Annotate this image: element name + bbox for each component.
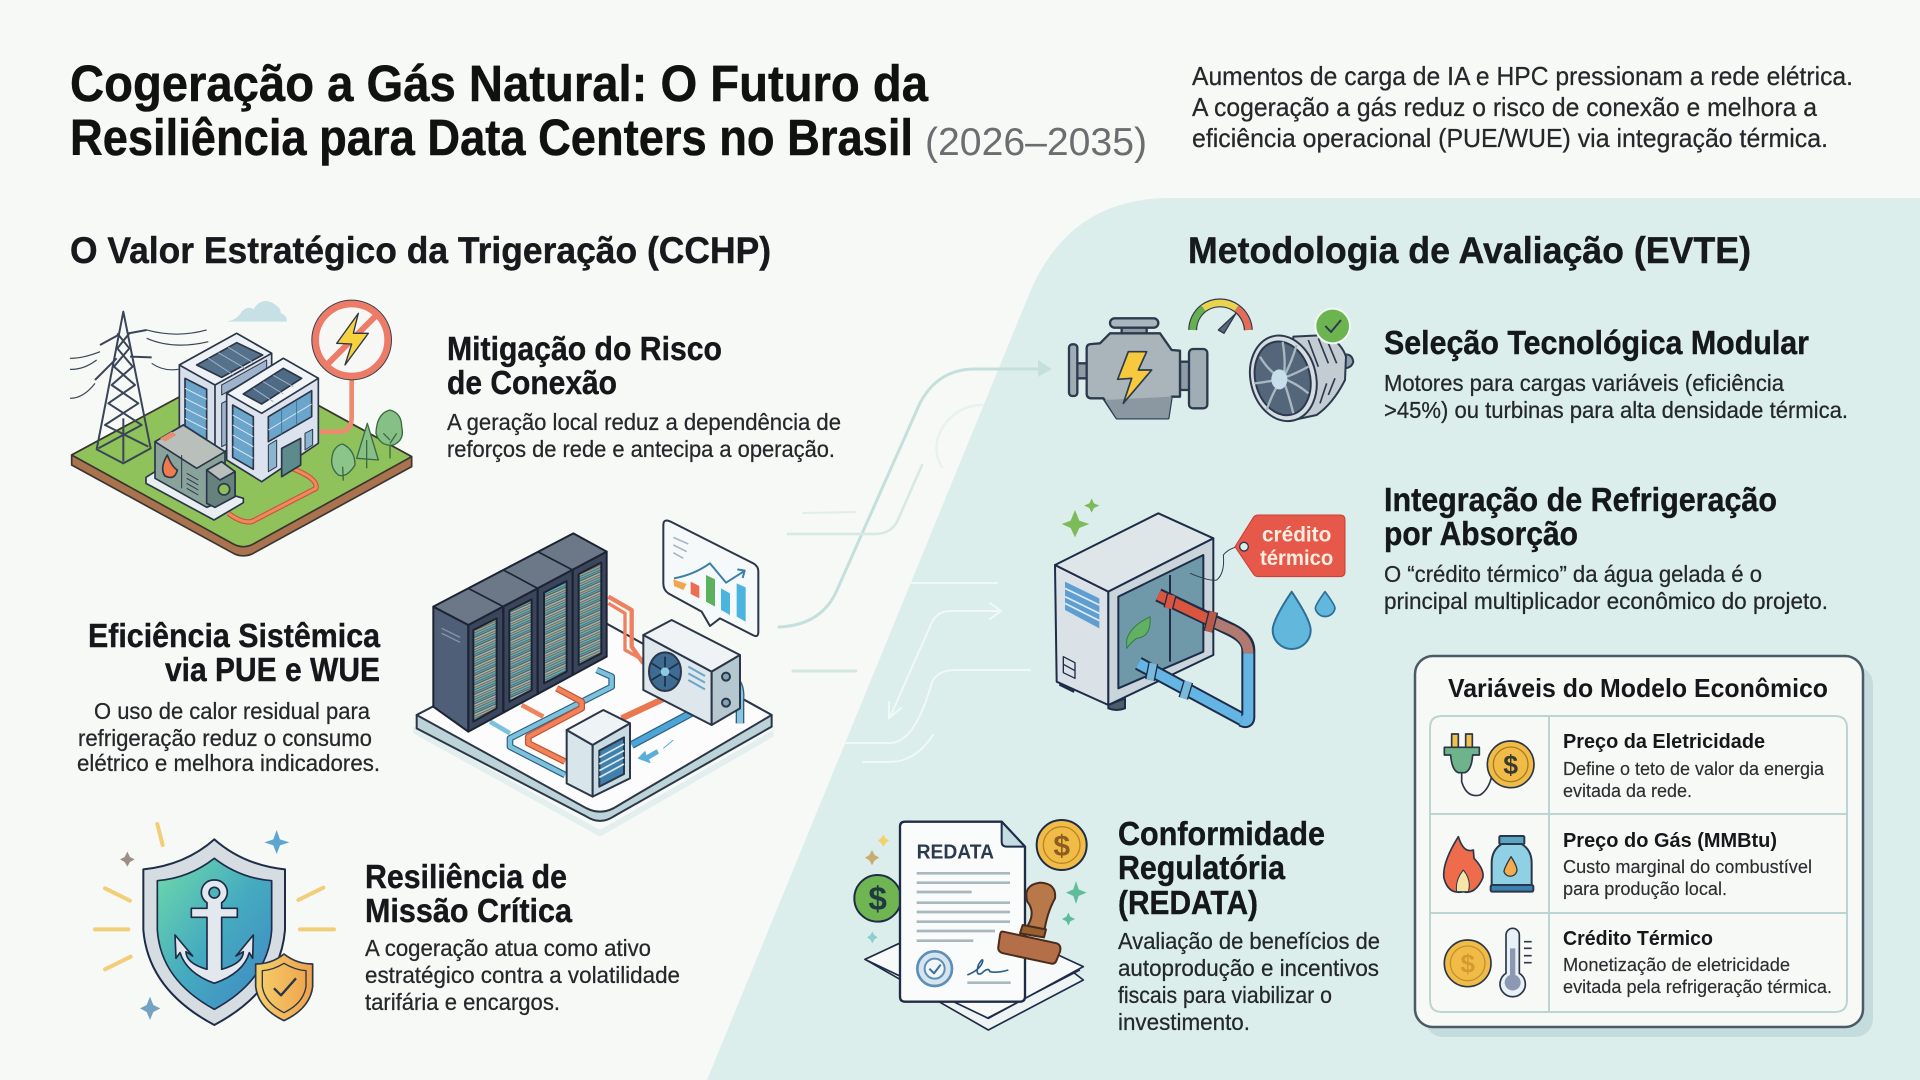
row: electricity price: evitada da rede. — [1563, 781, 1692, 801]
trees — [332, 410, 402, 481]
icon: flame — [1444, 837, 1483, 892]
engine — [1069, 318, 1207, 418]
illustration: REDATA document with stamp — [854, 820, 1087, 1030]
item: Integração de Refrigeração por Absorção — [1384, 481, 1828, 614]
gold coin: $ — [1053, 830, 1070, 863]
platform — [417, 620, 772, 821]
sparkles — [1062, 881, 1087, 926]
icon: coin: $ — [1460, 949, 1475, 979]
turbine — [1241, 309, 1353, 428]
panel: methodology background — [707, 198, 1920, 1080]
tag: crédito térmico: crédito — [1262, 524, 1331, 547]
sparkles — [1062, 498, 1099, 537]
item: Conformidade Regulatória (REDATA): autoprodução e incentivos — [1118, 955, 1379, 981]
heading: left section: O Valor Estratégico da Trigeração (CCHP) — [70, 230, 771, 271]
row: thermal credit: Crédito Térmico — [1563, 928, 1713, 950]
heading: right section: Metodologia de Avaliação (EVTE) — [1188, 230, 1751, 271]
flow arrow — [638, 740, 673, 763]
intro text — [1192, 61, 1853, 153]
green coin: $ — [868, 881, 887, 918]
item: Resiliência de Missão Crítica: tarifária e encargos. — [365, 989, 560, 1015]
item: Conformidade Regulatória (REDATA): investimento. — [1118, 1009, 1250, 1035]
document — [900, 822, 1025, 1002]
item: Seleção Tecnológica Modular: Motores para cargas variáveis (eficiência — [1384, 370, 1784, 396]
intro text: A cogeração a gás reduz o risco de conexão e melhora a — [1192, 92, 1818, 122]
item: Seleção Tecnológica Modular: Seleção Tecnológica Modular — [1384, 324, 1809, 361]
item: Integração de Refrigeração por Absorção: principal multiplicador econômico do projeto. — [1384, 588, 1828, 614]
item: Resiliência de Missão Crítica — [365, 858, 680, 1015]
stamp — [998, 883, 1060, 964]
row: gas price — [1563, 830, 1812, 899]
item: Integração de Refrigeração por Absorção: Integração de Refrigeração — [1384, 481, 1777, 518]
building front — [227, 358, 318, 482]
card shadow — [1425, 666, 1873, 1037]
tag: crédito térmico: térmico — [1260, 547, 1333, 570]
item: Mitigação do Risco de Conexão — [447, 330, 841, 462]
main shield — [143, 839, 285, 1025]
small shield — [256, 954, 313, 1021]
gauge — [1193, 303, 1248, 333]
intro text: Aumentos de carga de IA e HPC pressionam a rede elétrica. — [1192, 61, 1853, 91]
card body — [1415, 656, 1863, 1027]
item: Integração de Refrigeração por Absorção: O “crédito térmico” da água gelada é o — [1384, 561, 1762, 587]
item: Mitigação do Risco de Conexão: A geração local reduz a dependência de — [447, 409, 841, 435]
item: Conformidade Regulatória (REDATA): (REDATA) — [1118, 884, 1258, 921]
green coin — [854, 875, 901, 922]
item: Resiliência de Missão Crítica: A cogeração atua como ativo — [365, 935, 651, 961]
row: thermal credit — [1563, 928, 1832, 997]
illustration: shield with anchor — [95, 824, 334, 1025]
item: Eficiência Sistêmica via PUE e WUE: Eficiência Sistêmica — [88, 617, 381, 654]
item: Resiliência de Missão Crítica: estratégico contra a volatilidade — [365, 962, 680, 988]
chart bubble — [663, 521, 758, 636]
row: gas price: Custo marginal do combustível — [1563, 857, 1812, 877]
item: Eficiência Sistêmica via PUE e WUE: O uso de calor residual para — [94, 698, 370, 724]
platform shadow — [413, 727, 773, 837]
icon: coin — [1444, 940, 1491, 987]
item: Seleção Tecnológica Modular: >45%) ou turbinas para alta densidade térmica. — [1384, 397, 1848, 423]
item: Conformidade Regulatória (REDATA) — [1118, 815, 1380, 1035]
item: Integração de Refrigeração por Absorção: por Absorção — [1384, 515, 1578, 552]
item: Conformidade Regulatória (REDATA): Regulatória — [1118, 849, 1286, 886]
tag string — [1190, 546, 1244, 580]
panel: economic model variables — [1415, 656, 1873, 1037]
cloud — [227, 301, 287, 322]
building rear — [179, 333, 272, 457]
row: thermal credit: evitada pela refrigeração térmica. — [1563, 977, 1832, 997]
row: gas price: Preço do Gás (MMBtu) — [1563, 830, 1777, 852]
orange pipes — [320, 380, 352, 432]
icon: plug and coin: $ — [1503, 750, 1518, 780]
title: Cogeração a Gás Natural: O Futuro da — [70, 55, 929, 112]
anchor — [175, 880, 253, 983]
item: Conformidade Regulatória (REDATA): Conformidade — [1118, 815, 1325, 852]
icon: thermometer — [1500, 928, 1532, 997]
title: (2026–2035) — [925, 121, 1147, 164]
item: Mitigação do Risco de Conexão: reforços de rede e antecipa a operação. — [447, 436, 835, 462]
power line tower — [70, 312, 208, 463]
small exchanger — [567, 710, 630, 797]
illustration: data center campus with local generation — [70, 300, 412, 556]
item: Conformidade Regulatória (REDATA): Avaliação de benefícios de — [1118, 928, 1380, 954]
water drops — [1273, 592, 1311, 649]
item: Mitigação do Risco de Conexão: de Conexão — [447, 364, 617, 401]
item: Eficiência Sistêmica via PUE e WUE: via PUE e WUE — [165, 651, 380, 688]
item: Mitigação do Risco de Conexão: Mitigação do Risco — [447, 330, 722, 367]
gold coin — [1037, 820, 1087, 870]
illustration: absorption chiller with thermal credit tag — [1055, 498, 1345, 721]
intro text: eficiência operacional (PUE/WUE) via integração térmica. — [1192, 123, 1828, 153]
chiller cabinet — [1055, 513, 1213, 710]
item: Seleção Tecnológica Modular — [1384, 324, 1848, 423]
row: gas price: para produção local. — [1563, 879, 1727, 899]
flow arrows between columns — [779, 360, 1052, 762]
row: electricity price: Preço da Eletricidade — [1563, 731, 1765, 753]
item: Eficiência Sistêmica via PUE e WUE: elétrico e melhora indicadores. — [77, 750, 380, 776]
item: Resiliência de Missão Crítica: Resiliência de — [365, 858, 567, 895]
icon: plug and coin — [1444, 734, 1534, 796]
row: thermal credit: Monetização de eletricidade — [1563, 955, 1790, 975]
title — [70, 55, 1147, 166]
illustration: engine, gauge and turbine — [1069, 303, 1353, 428]
card title: Variáveis do Modelo Econômico — [1448, 673, 1828, 703]
item: Eficiência Sistêmica via PUE e WUE: refrigeração reduz o consumo — [78, 725, 372, 751]
papers beneath — [865, 940, 1083, 1030]
row: electricity price — [1563, 731, 1825, 801]
item: Conformidade Regulatória (REDATA): fiscais para viabilizar o — [1118, 982, 1332, 1008]
item: Resiliência de Missão Crítica: Missão Crítica — [365, 892, 573, 929]
cooling unit — [643, 620, 740, 725]
racks — [433, 533, 607, 732]
ground block — [72, 363, 412, 556]
table grid — [1430, 716, 1847, 1012]
gas generator — [146, 425, 243, 520]
no-grid sign — [312, 300, 391, 380]
icon: gas tank — [1491, 836, 1533, 892]
hot and cold pipes — [1138, 595, 1248, 721]
document: REDATA — [917, 841, 994, 863]
row: electricity price: Define o teto de valor da energia — [1563, 759, 1825, 779]
item: Eficiência Sistêmica via PUE e WUE — [77, 617, 381, 776]
sparkles — [120, 830, 289, 1020]
title: Resiliência para Data Centers no Brasil — [70, 109, 913, 166]
cooling pipes — [490, 597, 740, 775]
rays — [95, 824, 334, 969]
icons: plug, flame, tank, coin, thermometer — [1444, 734, 1534, 997]
illustration: server racks and cooling loop — [413, 521, 773, 837]
tag: crédito térmico — [1235, 515, 1345, 577]
